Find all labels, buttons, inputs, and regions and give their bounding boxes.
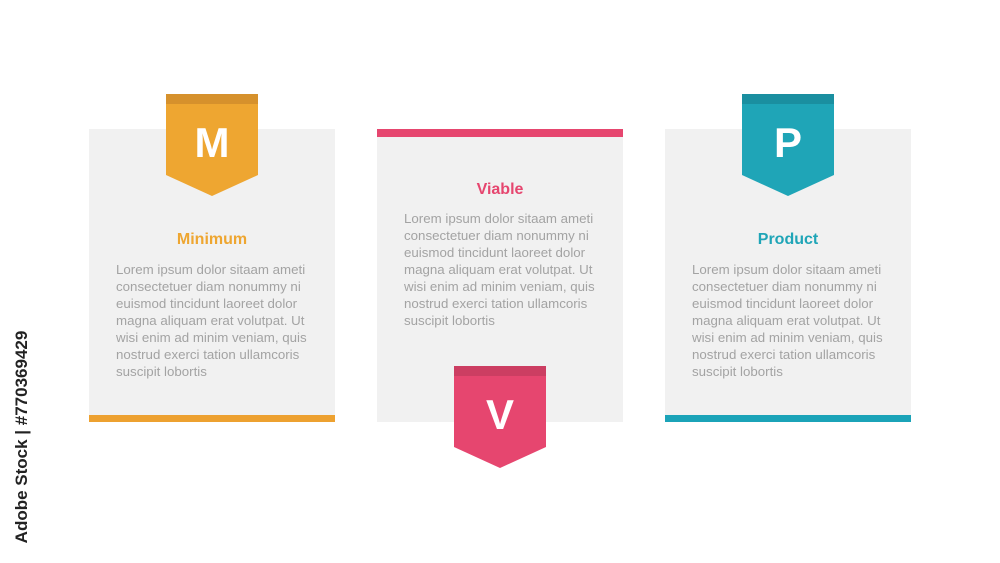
badge P: P	[774, 119, 802, 166]
card background	[665, 129, 911, 415]
badge P	[742, 94, 834, 196]
card background	[89, 129, 335, 415]
panel: minimum	[89, 94, 335, 422]
heading: Viable: Viable	[477, 181, 523, 198]
badge M: M	[194, 119, 230, 166]
panel: viable	[377, 129, 623, 468]
badge V	[454, 366, 546, 468]
text block: Lorem ipsum dolor sitaam ameti consectetuer diam nonummy ni euismod tincidunt laoreet dolor magna aliquam erat volutpat. Ut wisi enim ad minim veniam, quis nostrud exerci tation ullamcoris suscipit lobortis	[404, 211, 595, 328]
badge V: V	[486, 391, 514, 438]
text block: Lorem ipsum dolor sitaam ameti consectetuer diam nonummy ni euismod tincidunt laoreet dolor magna aliquam erat volutpat. Ut wisi enim ad minim veniam, quis nostrud exerci tation ullamcoris suscipit lobortis	[116, 262, 307, 379]
vertical stock id text: Adobe Stock | #770369429	[12, 331, 31, 543]
card background	[377, 137, 623, 422]
text block: Lorem ipsum dolor sitaam ameti consectetuer diam nonummy ni euismod tincidunt laoreet dolor magna aliquam erat volutpat. Ut wisi enim ad minim veniam, quis nostrud exerci tation ullamcoris suscipit lobortis	[692, 262, 883, 379]
bottom bar teal	[665, 415, 911, 422]
bottom bar orange	[89, 415, 335, 422]
badge M	[166, 94, 258, 196]
heading: Product: Product	[758, 231, 818, 248]
top bar pink	[377, 129, 623, 137]
heading: Minimum: Minimum	[177, 231, 247, 248]
panel: product	[665, 94, 911, 422]
